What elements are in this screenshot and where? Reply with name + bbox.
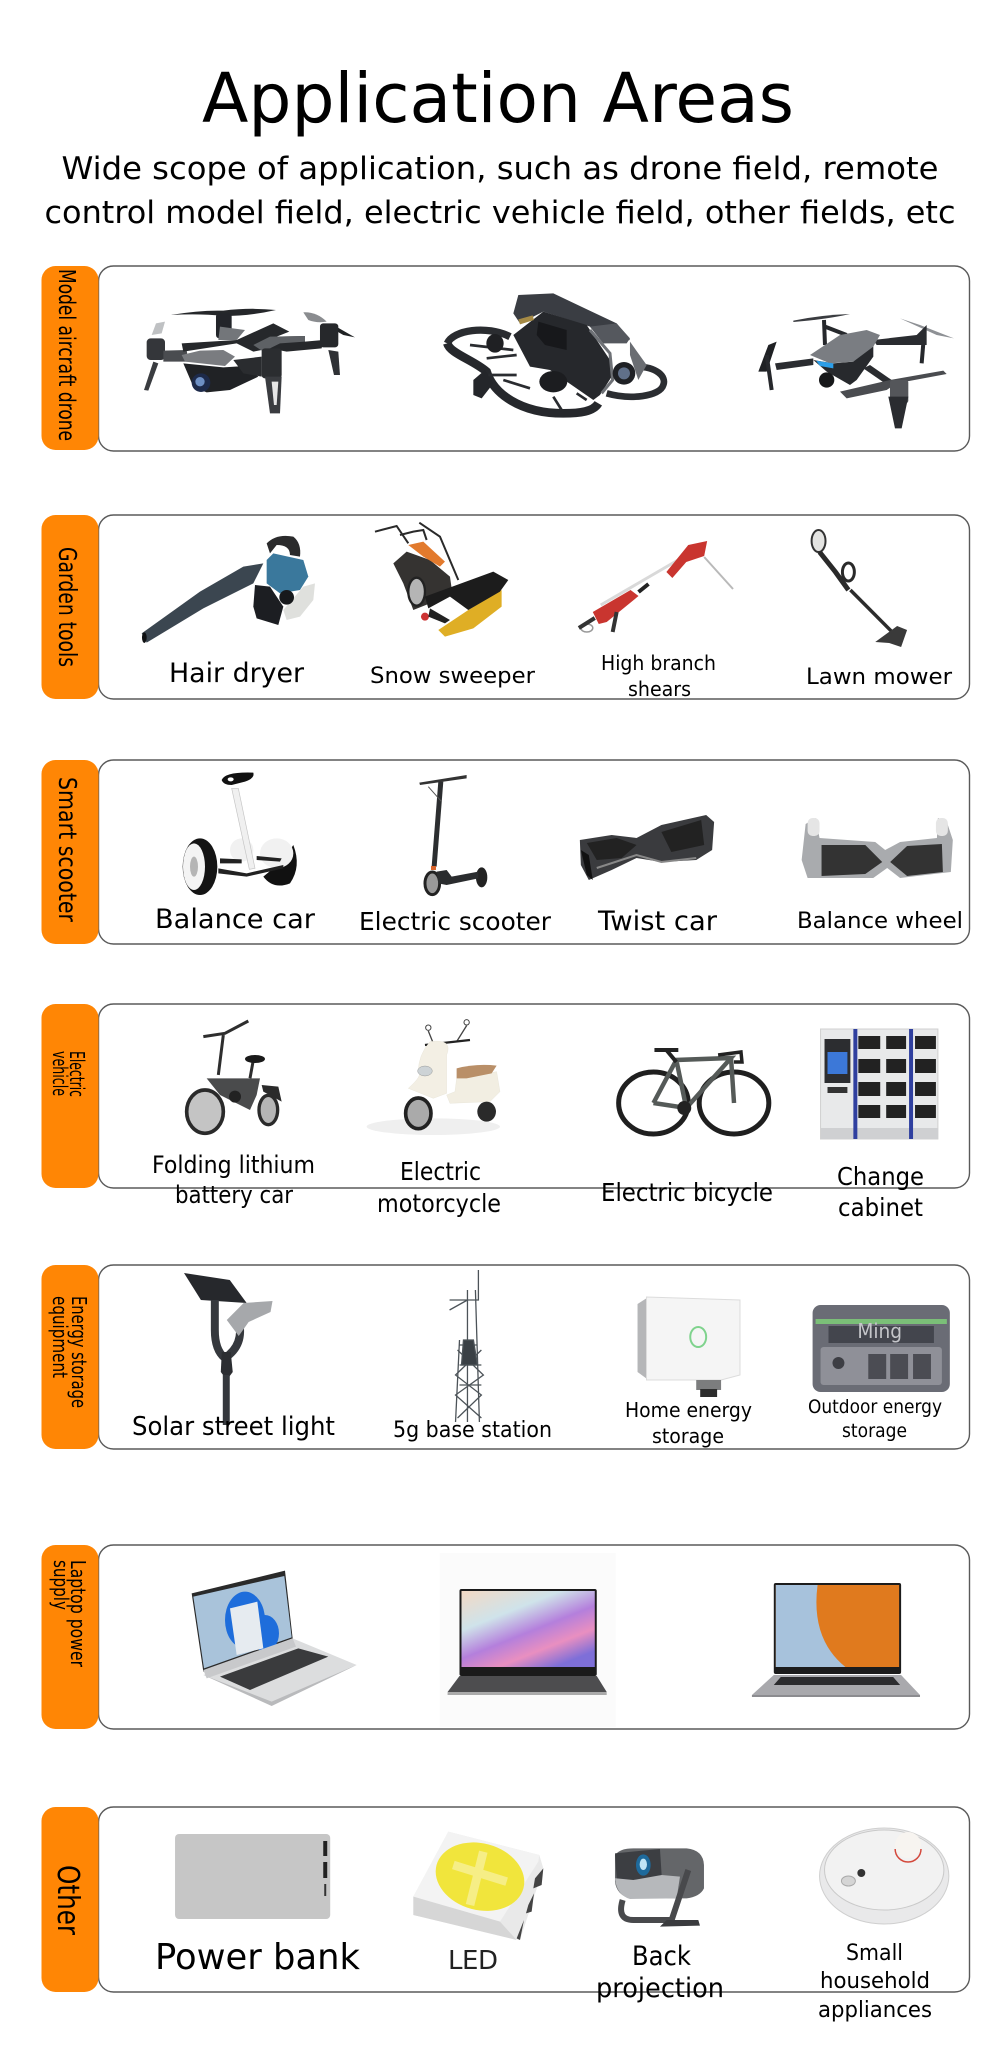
label: back projection: Back — [632, 1941, 691, 1972]
label: 5g base station: 5g base station — [393, 1418, 552, 1443]
icon: folding lithium battery car — [187, 1021, 282, 1133]
icon: laptop three — [752, 1583, 920, 1697]
panel: electric vehicle — [42, 1004, 970, 1222]
label: outdoor energy storage: storage — [842, 1420, 907, 1442]
subtitle: control model field, electric vehicle field, other fields, etc — [44, 195, 955, 231]
label: hair dryer: Hair dryer — [169, 658, 305, 689]
subtitle — [44, 151, 955, 231]
icon: high branch shears — [579, 541, 733, 632]
label: LED: LED — [448, 1946, 498, 1976]
tab: laptop power supply: Laptop power — [66, 1560, 90, 1668]
label: twist car: Twist car — [597, 906, 718, 937]
icon: snow sweeper — [375, 523, 508, 637]
tab: smart scooter — [42, 760, 98, 944]
icon: laptop two — [440, 1553, 616, 1727]
panel: smart scooter — [42, 760, 970, 944]
icon: home energy storage — [638, 1297, 740, 1397]
icon: electric motorcycle — [367, 1020, 500, 1135]
label: home energy storage — [625, 1398, 752, 1448]
label: change cabinet: Change — [837, 1162, 924, 1191]
icon: balance car — [183, 773, 297, 895]
label: Ming: Ming — [857, 1319, 902, 1343]
tab: model aircraft drone — [42, 266, 98, 450]
tab: electric vehicle — [42, 1004, 98, 1188]
label: back projection — [596, 1941, 724, 2004]
label: electric motorcycle — [377, 1157, 501, 1218]
icon: 5g base station — [450, 1270, 483, 1422]
panel: other — [42, 1807, 970, 2023]
label: folding lithium battery car: battery car — [175, 1181, 293, 1209]
tab: energy storage equipment: equipment — [48, 1296, 72, 1378]
label: small household appliances: Small — [846, 1941, 903, 1966]
panel: garden tools — [42, 515, 970, 701]
label: outdoor energy storage: Outdoor energy — [808, 1396, 942, 1418]
title: Application Areas — [202, 59, 794, 139]
tab: other — [42, 1807, 98, 1992]
icon: leaf blower — [142, 536, 315, 643]
icon: twist car — [580, 815, 714, 880]
icon: electric scooter — [419, 775, 487, 895]
tab: garden tools — [42, 515, 98, 699]
tab: smart scooter: Smart scooter — [53, 777, 82, 923]
label: high branch shears: shears — [628, 677, 691, 701]
icon: electric bicycle — [619, 1050, 769, 1134]
label: balance car: Balance car — [155, 904, 316, 935]
label: change cabinet: cabinet — [838, 1193, 923, 1222]
label: lawn mower: Lawn mower — [806, 665, 953, 690]
label: high branch shears: High branch — [601, 651, 716, 675]
label: back projection: projection — [596, 1973, 724, 2004]
label: balance wheel: Balance wheel — [797, 909, 963, 934]
label: electric motorcycle: Electric — [400, 1157, 481, 1186]
tab: electric vehicle: vehicle — [48, 1051, 72, 1096]
panel: model aircraft drone — [42, 266, 970, 451]
icon: laptop one — [192, 1571, 357, 1706]
tab: energy storage equipment: Energy storage — [67, 1296, 91, 1408]
label: folding lithium battery car: Folding lithium — [152, 1151, 315, 1179]
panel: energy storage equipment — [42, 1265, 970, 1449]
icon: drone three — [758, 314, 954, 428]
label: snow sweeper: Snow sweeper — [370, 664, 536, 689]
label: electric scooter: Electric scooter — [359, 907, 552, 936]
tab: other: Other — [50, 1865, 85, 1936]
label: electric bicycle: Electric bicycle — [601, 1178, 773, 1207]
tab: laptop power supply: supply — [49, 1560, 73, 1610]
tab: energy storage equipment — [42, 1265, 98, 1449]
label: small household appliances: household — [820, 1969, 930, 1994]
icon: projector — [615, 1848, 704, 1927]
icon: LED — [413, 1832, 543, 1940]
panel: laptop power supply — [42, 1545, 970, 1729]
tab: electric vehicle: Electric — [65, 1051, 89, 1097]
icon: solar street light — [184, 1273, 273, 1425]
tab: model aircraft drone: Model aircraft drone — [53, 269, 79, 441]
label: outdoor energy storage — [808, 1396, 942, 1442]
label: home energy storage: storage — [652, 1424, 724, 1448]
icon: drone one — [144, 309, 355, 413]
label: folding lithium battery car — [152, 1151, 315, 1209]
label: power bank: Power bank — [155, 1937, 360, 1978]
icon: power bank — [175, 1834, 330, 1919]
tab: laptop power supply — [42, 1545, 98, 1729]
icon: outdoor energy storage — [813, 1305, 950, 1392]
subtitle: Wide scope of application, such as drone field, remote — [62, 151, 938, 187]
label: high branch shears — [601, 651, 716, 701]
icon: lawn mower — [812, 530, 907, 647]
icon: robot vacuum — [820, 1828, 949, 1924]
icon: change cabinet — [821, 1029, 938, 1139]
icon: drone two — [447, 293, 664, 413]
tab: garden tools: Garden tools — [53, 547, 82, 667]
label: electric motorcycle: motorcycle — [377, 1189, 501, 1218]
label: home energy storage: Home energy — [625, 1398, 752, 1422]
label: solar street light: Solar street light — [132, 1412, 335, 1442]
label: small household appliances: appliances — [818, 1998, 932, 2023]
icon: balance wheel — [802, 818, 953, 878]
label: change cabinet — [837, 1162, 924, 1222]
label: small household appliances — [818, 1941, 932, 2023]
